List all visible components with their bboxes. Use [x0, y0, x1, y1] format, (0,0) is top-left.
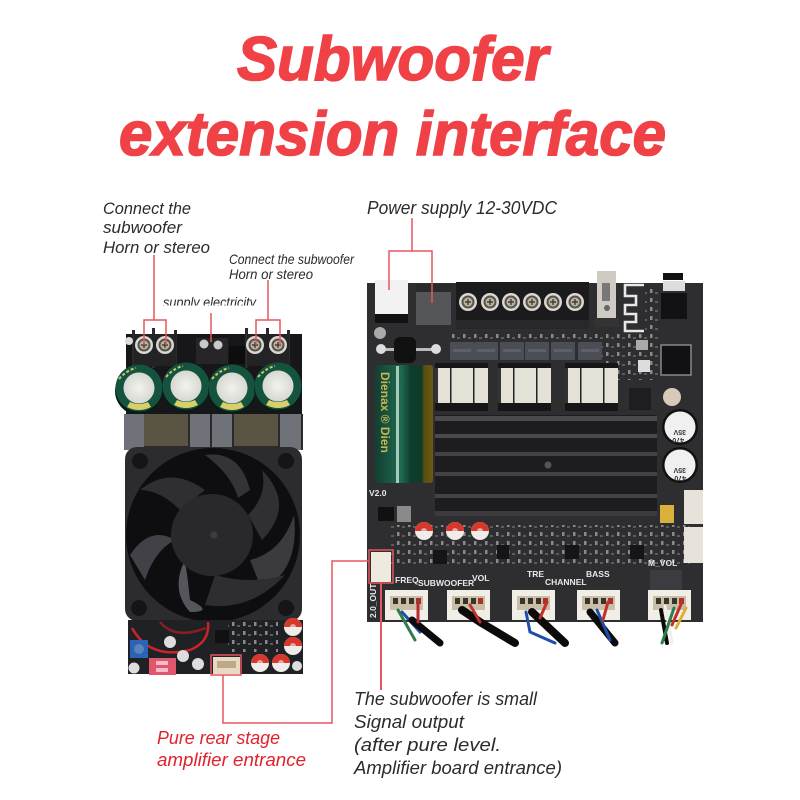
- 470uF capacitors: 35V: [673, 466, 686, 473]
- PCB silk labels: SUBWOOFER: [418, 578, 474, 588]
- label: pure rear stage: Pure rear stage: [157, 728, 280, 748]
- heatsink: [435, 415, 657, 516]
- panel: main amplifier board: [367, 271, 703, 643]
- label: subwoofer signal output: Amplifier board entrance): [353, 758, 562, 778]
- label: connect subwoofer left: Connect the: [103, 199, 191, 218]
- label: pure rear stage: amplifier entrance: [157, 750, 306, 770]
- large green capacitor: [375, 365, 433, 483]
- diode: [374, 327, 441, 363]
- label: connect subwoofer right: [229, 251, 355, 282]
- lower board components: [378, 490, 703, 596]
- label: connect subwoofer left: [103, 199, 210, 257]
- bottom control PCB: [128, 618, 303, 675]
- 470uF capacitors: 35V: [673, 428, 686, 435]
- inductor row: [124, 414, 303, 450]
- label: subwoofer signal output: The subwoofer is small: [354, 689, 538, 709]
- power blocks: [435, 363, 618, 411]
- V2.0 mark: V2.0: [369, 488, 387, 498]
- power connector: [416, 290, 451, 325]
- PCB silk labels: TRE: [527, 569, 544, 579]
- label: subwoofer signal output: [353, 689, 562, 778]
- PCB base: [367, 283, 703, 622]
- label: supply electricity: supply electricity: [163, 294, 257, 310]
- terminal block with six screws: [456, 282, 589, 329]
- PCB silk labels: VOL: [472, 573, 489, 583]
- fan: [125, 447, 302, 622]
- audio jack and chip: [629, 273, 691, 410]
- capacitors: [115, 362, 302, 415]
- label: connect subwoofer left: Horn or stereo: [103, 238, 210, 257]
- 470uF capacitors: 470: [672, 436, 684, 443]
- SMD texture: [390, 285, 690, 565]
- PCB silk labels: M_VOL: [648, 558, 677, 568]
- large green capacitor: Dienax ® Dien: [378, 372, 392, 453]
- PCB silk labels: CHANNEL: [545, 577, 587, 587]
- title: Subwoofer: [237, 25, 551, 94]
- label: power supply: Power supply 12-30VDC: [367, 198, 558, 218]
- label: subwoofer signal output: (after pure level.: [354, 735, 501, 755]
- DC jack white: [375, 280, 408, 314]
- 470uF capacitors: 470: [674, 474, 686, 481]
- PCB silk labels: 2.0_OUT: [368, 583, 378, 618]
- 470uF capacitors: [662, 409, 698, 483]
- cables: [398, 602, 686, 643]
- label: subwoofer signal output: Signal output: [354, 712, 465, 732]
- switch: [595, 271, 619, 327]
- label: pure rear stage: [157, 728, 306, 770]
- label: connect subwoofer left: subwoofer: [103, 218, 183, 237]
- label: connect subwoofer right: Horn or stereo: [229, 266, 313, 282]
- PCB silk labels: FREQ: [395, 575, 419, 585]
- bottom plugs: [385, 590, 691, 620]
- red callout lines: [144, 218, 432, 723]
- panel: subwoofer amplifier board with fan: [115, 328, 303, 675]
- connector: subwoofer output: [371, 552, 391, 582]
- terminal blocks and top PCB: [125, 328, 302, 414]
- label: connect subwoofer right: Connect the subwoofer: [229, 251, 355, 267]
- PCB silk labels: BASS: [586, 569, 610, 579]
- inductors: [450, 342, 602, 360]
- PCB silk labels: [368, 558, 677, 618]
- title: extension interface: [119, 100, 666, 169]
- title: [119, 25, 666, 169]
- bluetooth antenna: [625, 285, 644, 331]
